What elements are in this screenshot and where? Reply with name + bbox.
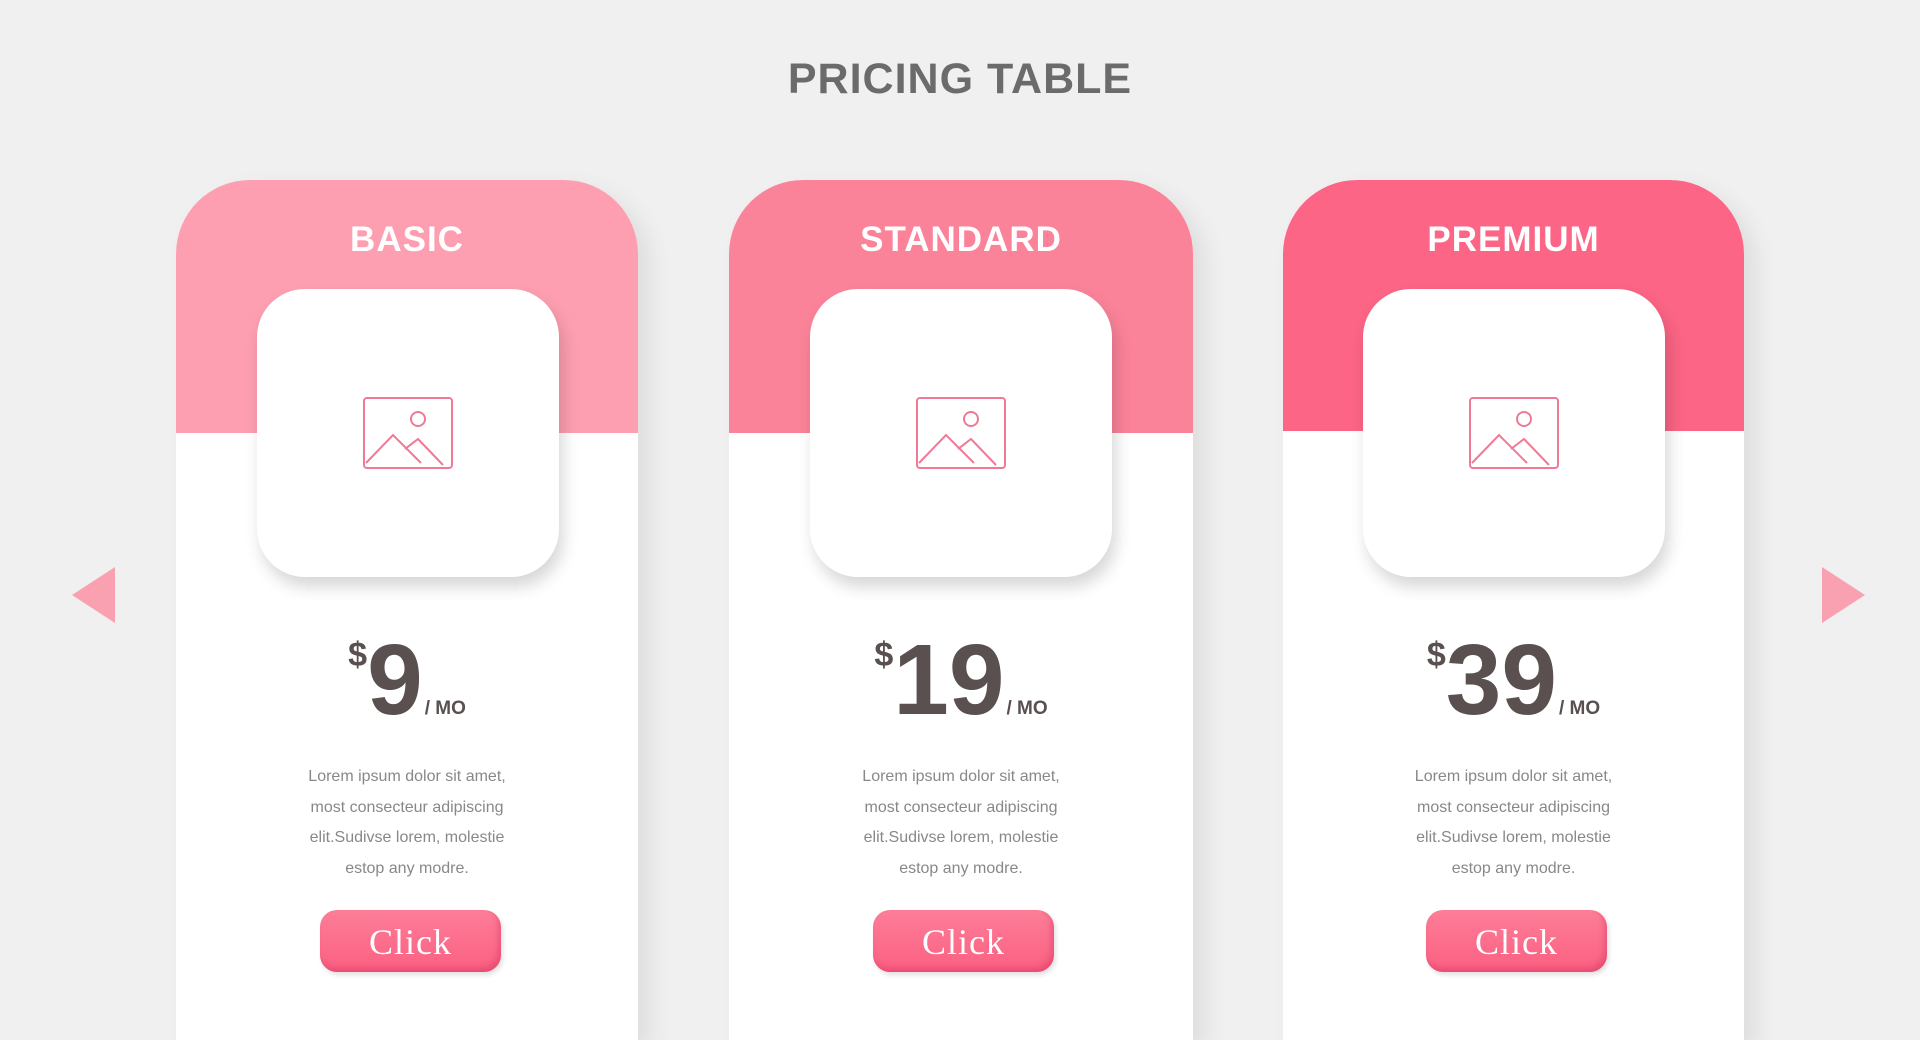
price: basic: $9/ MO: [348, 624, 466, 736]
description: basic: Lorem ipsum dolor sit amet,: [308, 768, 506, 785]
panel: premium: [1283, 180, 1744, 1040]
button: premium: [1426, 910, 1607, 972]
button: basic: [320, 910, 501, 972]
heading: standard: STANDARD: [860, 220, 1062, 259]
button: standard: Click: [922, 922, 1005, 962]
button: premium: Click: [1475, 922, 1558, 962]
arrow: left: [72, 567, 115, 623]
description: basic: [308, 768, 506, 876]
panel: basic: [176, 180, 638, 1040]
description: basic: elit.Sudivse lorem, molestie: [310, 829, 504, 846]
button: standard: [873, 910, 1054, 972]
icon: image: [363, 397, 453, 469]
arrow: right: [1822, 567, 1865, 623]
header band: standard: [729, 180, 1193, 433]
panel: standard: [729, 180, 1193, 1040]
price: premium: $39/ MO: [1427, 624, 1600, 736]
description: standard: [862, 768, 1060, 876]
image box: premium: [1363, 289, 1665, 577]
button: basic: Click: [369, 922, 452, 962]
icon: image: [916, 397, 1006, 469]
description: standard: Lorem ipsum dolor sit amet,: [862, 768, 1060, 785]
description: premium: elit.Sudivse lorem, molestie: [1416, 829, 1611, 846]
description: basic: most consecteur adipiscing: [310, 798, 503, 816]
description: premium: most consecteur adipiscing: [1417, 798, 1610, 816]
header band: premium: [1283, 180, 1744, 431]
description: premium: [1415, 768, 1612, 876]
header band: basic: [176, 180, 638, 433]
icon: image: [1469, 397, 1559, 469]
description: premium: estop any modre.: [1452, 860, 1575, 876]
price: standard: $19/ MO: [874, 624, 1048, 736]
description: basic: estop any modre.: [345, 860, 469, 876]
title: PRICING TABLE: [788, 55, 1132, 103]
description: premium: Lorem ipsum dolor sit amet,: [1415, 768, 1612, 785]
heading: basic: BASIC: [350, 220, 464, 259]
image box: standard: [810, 289, 1112, 577]
description: standard: elit.Sudivse lorem, molestie: [864, 829, 1058, 846]
description: standard: estop any modre.: [899, 860, 1023, 876]
image box: basic: [257, 289, 559, 577]
description: standard: most consecteur adipiscing: [864, 798, 1057, 816]
heading: premium: PREMIUM: [1427, 220, 1600, 259]
